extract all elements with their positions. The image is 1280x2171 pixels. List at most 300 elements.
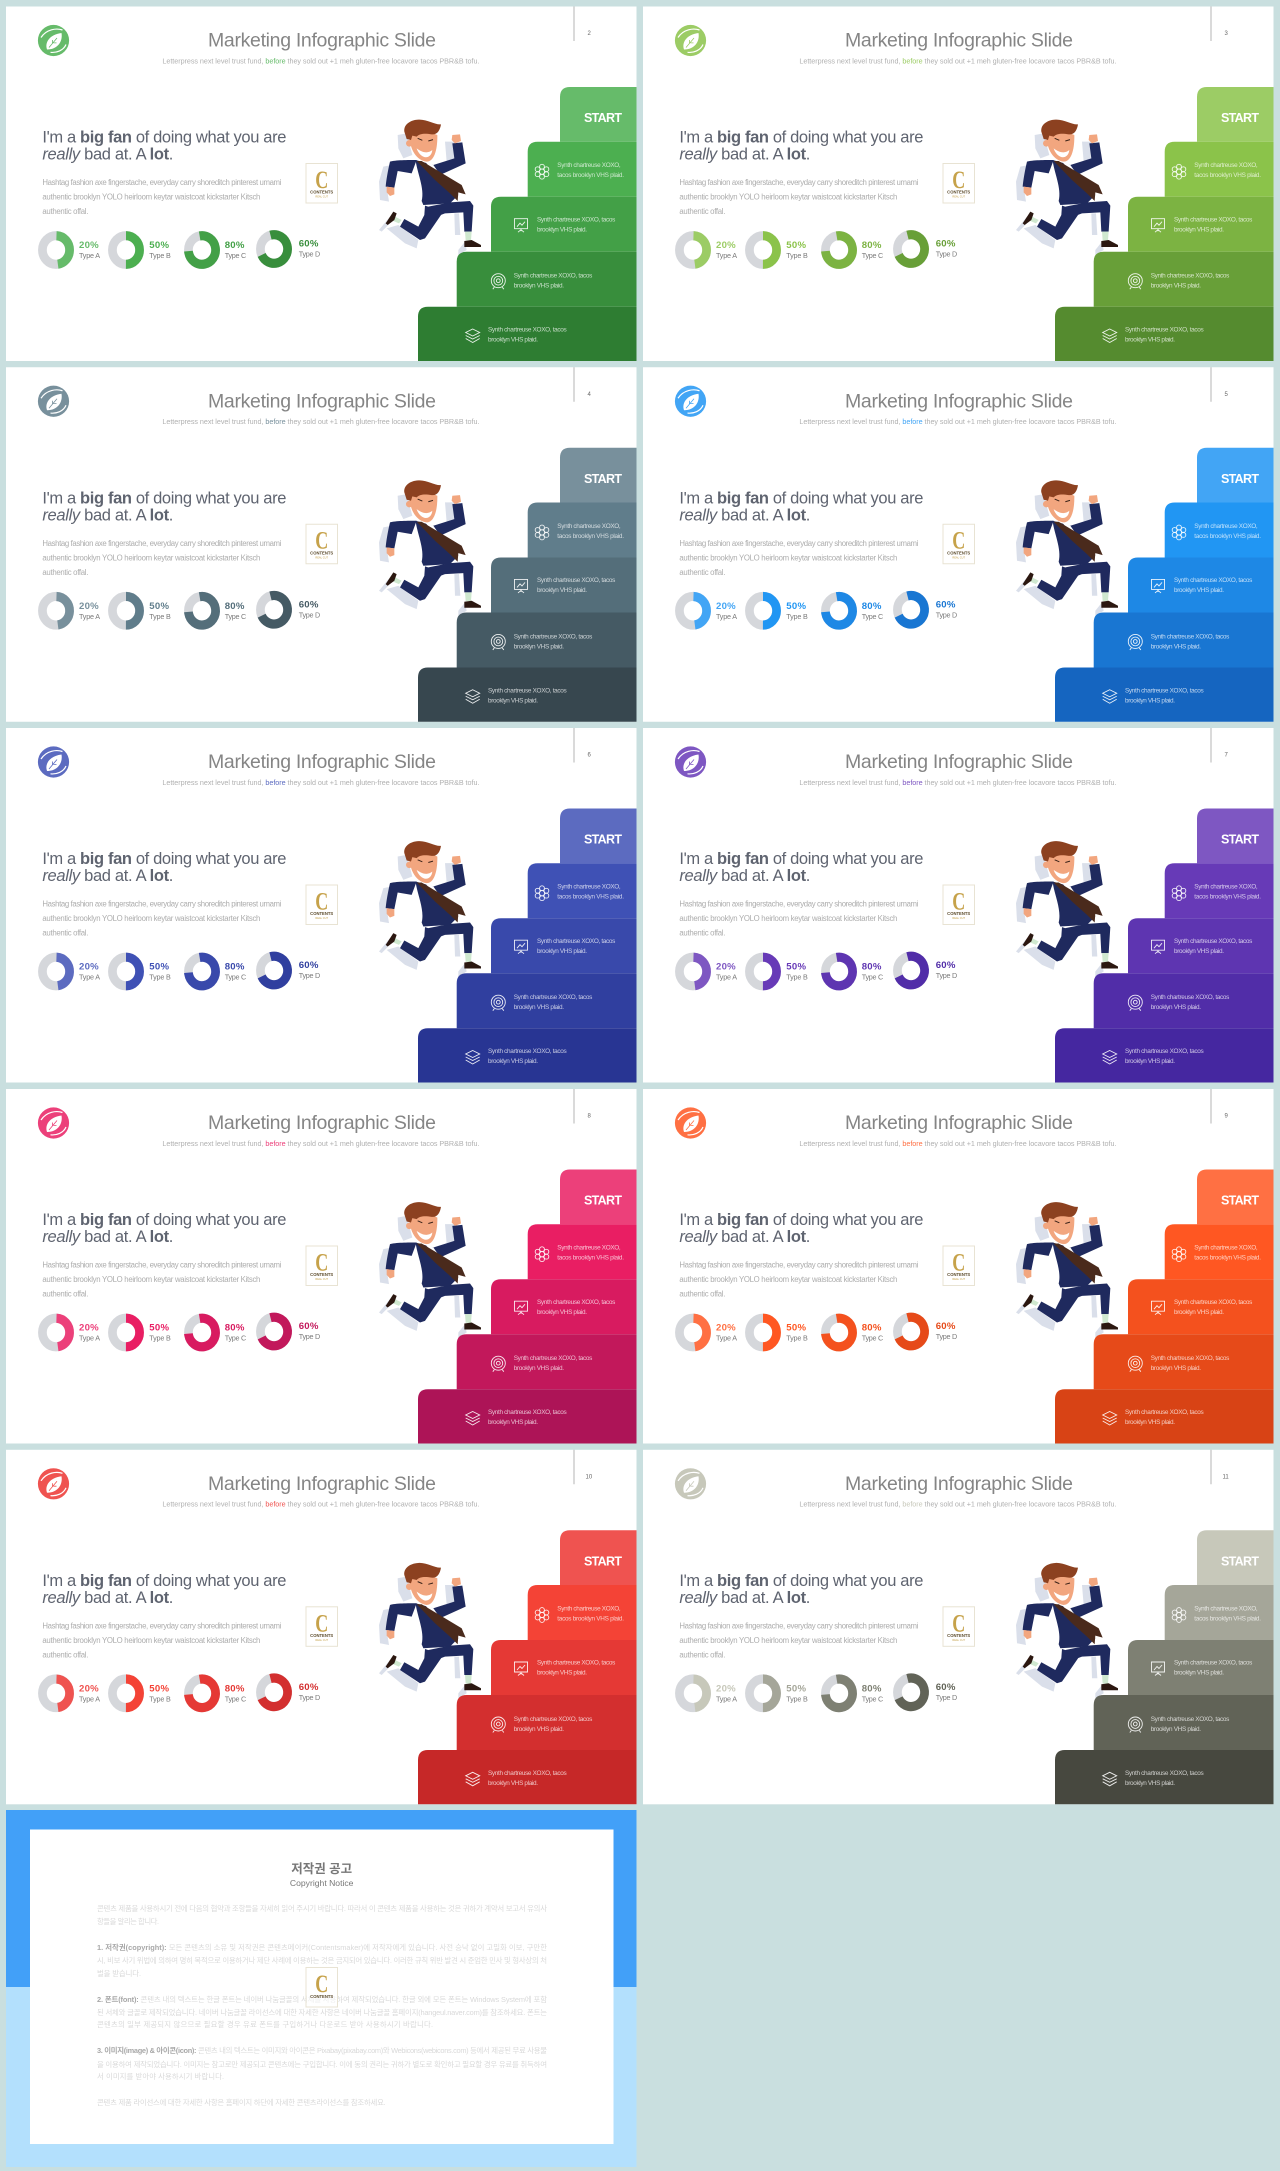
donut: Type A: Type A [716, 612, 737, 621]
stamp: contents logo: C [952, 1609, 965, 1637]
step: target: Synth chartreuse XOXO, tacos [514, 633, 592, 640]
body text: authentic brooklyn YOLO heirloom keytar waistcoat kickstarter Kitsch [42, 192, 260, 202]
headline: I'm a big fan of doing what you are [42, 1211, 286, 1229]
staircase [1055, 1530, 1274, 1804]
page number: 7 [1224, 752, 1228, 758]
staircase [1055, 448, 1274, 722]
step: layers: brooklyn VHS plaid. [488, 1780, 538, 1787]
step: target [457, 1695, 636, 1750]
slide: red, page 10 [6, 1450, 636, 1804]
headline: I'm a big fan of doing what you are [679, 1572, 923, 1590]
step: presentation: brooklyn VHS plaid. [1174, 1670, 1224, 1677]
donut: Type A: 20% [79, 962, 99, 972]
donut: Type B: Type B [786, 1334, 808, 1342]
donut: Type B: 50% [149, 962, 169, 972]
step: layers: Synth chartreuse XOXO, tacos [488, 1048, 567, 1055]
donut: Type A: 20% [79, 1322, 99, 1334]
subtitle: Letterpress next level trust fund, before they sold out +1 meh gluten-free locavore tacos PBR&B tofu. [799, 56, 1116, 65]
donut: Type A: Type A [716, 1334, 737, 1342]
page number: 10 [586, 1474, 593, 1480]
headline [42, 1572, 286, 1607]
logo: leaf [38, 386, 69, 417]
headline: I'm a big fan of doing what you are [42, 489, 286, 507]
donut: Type C [823, 594, 883, 627]
donut: Type D: 60% [299, 960, 319, 971]
slide: indigo, page 6 [6, 728, 636, 1082]
donut: Type A [679, 1318, 737, 1347]
slide: blue, page 5 [643, 367, 1274, 722]
donut: Type D: Type D [936, 1332, 957, 1341]
step: flower: tacos brooklyn VHS plaid. [1194, 1254, 1261, 1262]
donut: Type B: Type B [786, 612, 808, 621]
logo: leaf [675, 1468, 706, 1499]
donut: Type C: Type C [862, 1334, 883, 1342]
donut: Type C [186, 594, 246, 627]
step: layers [1055, 1028, 1274, 1082]
step: presentation: Synth chartreuse XOXO, tacos [1174, 1660, 1252, 1667]
step: target: Synth chartreuse XOXO, tacos [1151, 633, 1229, 640]
step: layers: Synth chartreuse XOXO, tacos [1125, 1770, 1204, 1777]
step: start: START [584, 472, 622, 486]
donut: Type B: Type B [149, 1694, 171, 1703]
step: start: START [584, 832, 622, 846]
stamp: contents logo [943, 1246, 974, 1286]
copyright footer line: 콘텐츠 제품 라이선스에 대한 자세한 사항은 홈페이지 하단에 자세한 콘텐츠라이선스를 참조하세요. [97, 2098, 386, 2107]
step: flower: tacos brooklyn VHS plaid. [1194, 894, 1261, 900]
donut: Type C [823, 1677, 883, 1710]
step: target: brooklyn VHS plaid. [514, 283, 564, 290]
page number: 5 [1224, 392, 1228, 398]
step: layers [418, 1028, 636, 1082]
donut: Type B: 50% [149, 240, 169, 251]
staircase [1055, 87, 1274, 361]
copyright heading: 저작권 공고 [291, 1861, 352, 1876]
donut: Type A [42, 235, 100, 265]
donut: Type B [749, 1679, 808, 1708]
stamp: contents logo: REAL CUT [315, 916, 328, 920]
step: flower: Synth chartreuse XOXO, [1194, 1605, 1258, 1612]
stamp: contents logo: C [952, 1249, 965, 1276]
headline: I'm a big fan of doing what you are [42, 1572, 286, 1590]
donut: Type A [679, 596, 737, 626]
subtitle: Letterpress next level trust fund, before they sold out +1 meh gluten-free locavore tacos PBR&B tofu. [162, 417, 479, 426]
copyright section 1: 1. 저작권(copyright): 모든 콘텐츠의 소유 및 저작권은 콘텐츠메이커(Contentsmaker)에 저작자에게 있습니다. 사전 승낙 없이 고밀화 이보, 구만한 [97, 1943, 547, 1952]
step: layers: Synth chartreuse XOXO, tacos [1125, 687, 1204, 694]
donut: Type C: Type C [225, 1694, 246, 1703]
body text: authentic offal. [42, 928, 88, 938]
stamp: contents logo [306, 1607, 338, 1646]
stamp: contents logo: C [315, 166, 328, 194]
stamp: contents logo [306, 1246, 338, 1286]
step: presentation: brooklyn VHS plaid. [537, 1309, 587, 1316]
subtitle: Letterpress next level trust fund, before they sold out +1 meh gluten-free locavore tacos PBR&B tofu. [162, 778, 479, 787]
donut: Type A [679, 957, 737, 986]
donut: Type A: 20% [79, 1683, 99, 1694]
title: Marketing Infographic Slide [845, 1112, 1073, 1134]
body text [42, 1260, 282, 1298]
logo: leaf [38, 746, 69, 778]
step: flower: tacos brooklyn VHS plaid. [557, 1615, 624, 1622]
stamp: contents logo overlay: C [315, 1970, 328, 1998]
stamp: contents logo: REAL CUT [952, 916, 965, 920]
donut: Type D: Type D [299, 1693, 320, 1702]
step: flower: Synth chartreuse XOXO, [1194, 884, 1258, 890]
staircase [418, 1530, 636, 1804]
body text: authentic brooklyn YOLO heirloom keytar waistcoat kickstarter Kitsch [679, 192, 897, 202]
stamp: contents logo: C [315, 1249, 328, 1276]
donut: Type D: Type D [936, 610, 957, 619]
step: presentation: brooklyn VHS plaid. [1174, 226, 1224, 233]
donut: Type B [112, 596, 171, 625]
step: presentation: brooklyn VHS plaid. [1174, 948, 1224, 955]
stamp: contents logo: CONTENTS [947, 190, 970, 194]
body text: authentic offal. [42, 1290, 88, 1298]
donut: Type A: 20% [716, 1322, 736, 1334]
donut: Type A: Type A [79, 612, 100, 621]
step: flower: tacos brooklyn VHS plaid. [557, 533, 624, 540]
donut: Type B [749, 596, 808, 625]
step: start [560, 1170, 636, 1224]
body text: Hashtag fashion axe fingerstache, everyday carry shoreditch pinterest umami [42, 1260, 282, 1270]
stamp: contents logo overlay: CONTENTS [310, 1994, 333, 1999]
step: layers: brooklyn VHS plaid. [1125, 1780, 1175, 1787]
step: layers: Synth chartreuse XOXO, tacos [1125, 1409, 1204, 1416]
character: running businessman [379, 1202, 481, 1337]
logo: leaf [675, 1107, 706, 1139]
stamp: contents logo: CONTENTS [310, 911, 333, 916]
subtitle: Letterpress next level trust fund, before they sold out +1 meh gluten-free locavore tacos PBR&B tofu. [162, 1500, 479, 1509]
character: running businessman [379, 1563, 481, 1698]
page number: 3 [1224, 31, 1228, 37]
step: target: brooklyn VHS plaid. [1151, 643, 1201, 650]
body text: Hashtag fashion axe fingerstache, everyday carry shoreditch pinterest umami [42, 178, 282, 187]
step: target: Synth chartreuse XOXO, tacos [1151, 273, 1229, 280]
staircase [1055, 1170, 1274, 1444]
donut: Type A [679, 235, 737, 265]
body text: authentic offal. [42, 207, 88, 216]
staircase [418, 448, 636, 722]
body text: Hashtag fashion axe fingerstache, everyday carry shoreditch pinterest umami [679, 178, 919, 187]
page number [574, 6, 592, 41]
step: start [1197, 808, 1274, 863]
step: flower: tacos brooklyn VHS plaid. [1194, 1615, 1261, 1622]
body text: authentic brooklyn YOLO heirloom keytar waistcoat kickstarter Kitsch [42, 1636, 260, 1645]
page number [574, 1089, 592, 1124]
donut: Type B: 50% [786, 1683, 806, 1694]
step: target: Synth chartreuse XOXO, tacos [1151, 1716, 1229, 1723]
page number: 6 [588, 752, 592, 758]
donut: Type D [257, 1675, 320, 1710]
donut: Type D: 60% [936, 960, 956, 971]
donut: Type B [112, 1679, 171, 1708]
headline: really bad at. A lot. [679, 1589, 810, 1607]
step: layers [418, 307, 636, 361]
stamp: contents logo: REAL CUT [315, 555, 328, 559]
donut: Type D [257, 1314, 320, 1349]
step: layers: brooklyn VHS plaid. [488, 1058, 538, 1065]
body text: authentic offal. [42, 568, 88, 577]
step: layers [1055, 667, 1274, 722]
donut: Type B: Type B [149, 612, 171, 621]
step: presentation [491, 1279, 636, 1334]
stamp: contents logo [943, 885, 974, 924]
step: layers: Synth chartreuse XOXO, tacos [488, 687, 567, 694]
body text: authentic offal. [679, 1290, 725, 1298]
step: layers [418, 667, 636, 722]
donut: Type D: 60% [299, 599, 319, 610]
donut: Type A: 20% [79, 601, 99, 612]
logo: leaf [675, 386, 706, 417]
stamp: contents logo [306, 524, 338, 564]
headline: really bad at. A lot. [679, 867, 810, 885]
step: layers [418, 1750, 636, 1804]
step: presentation [1128, 557, 1274, 612]
step: target: brooklyn VHS plaid. [514, 643, 564, 650]
page number [574, 1450, 593, 1484]
donut: Type D: 60% [299, 239, 319, 250]
step: start: START [584, 111, 622, 125]
body text [679, 178, 919, 216]
headline [679, 1572, 923, 1607]
donut: Type A: Type A [79, 251, 100, 260]
copyright intro: 콘텐츠 제품을 사용하시기 전에 다음의 협약과 조항들을 자세히 읽어 주시기 바랍니다. 따라서 이 콘텐츠 제품을 사용하는 것은 귀하가 계약서 보고서 유의사 [97, 1904, 547, 1913]
headline: really bad at. A lot. [679, 506, 810, 524]
donut: Type A [679, 1679, 737, 1708]
step: presentation: Synth chartreuse XOXO, tacos [537, 1299, 615, 1306]
step: flower: Synth chartreuse XOXO, [557, 523, 621, 530]
page number: 8 [588, 1114, 592, 1120]
title: Marketing Infographic Slide [208, 30, 436, 52]
body text: authentic brooklyn YOLO heirloom keytar waistcoat kickstarter Kitsch [679, 1275, 897, 1284]
step: start: START [1221, 1554, 1259, 1568]
headline [42, 850, 286, 885]
donut: Type C: Type C [225, 251, 246, 260]
donut: Type D [257, 232, 320, 266]
body text: Hashtag fashion axe fingerstache, everyday carry shoreditch pinterest umami [679, 900, 919, 908]
page number: 11 [1222, 1474, 1229, 1480]
slide: warm grey, page 11 [643, 1450, 1274, 1804]
donut: Type D: 60% [936, 1682, 956, 1693]
step: flower: tacos brooklyn VHS plaid. [557, 1254, 624, 1262]
stamp: contents logo: CONTENTS [947, 550, 970, 555]
step: layers: brooklyn VHS plaid. [1125, 697, 1175, 704]
donut: Type C [186, 233, 246, 267]
step: layers [1055, 307, 1274, 361]
page number [1211, 367, 1228, 402]
step: flower: Synth chartreuse XOXO, [1194, 523, 1258, 530]
step: flower [528, 502, 636, 557]
logo: leaf [38, 1107, 69, 1139]
stamp: contents logo: CONTENTS [947, 1633, 970, 1638]
step: flower: tacos brooklyn VHS plaid. [557, 894, 624, 900]
copyright intro [97, 1904, 547, 1926]
step: layers: brooklyn VHS plaid. [1125, 1419, 1175, 1426]
donut: Type B: 50% [786, 601, 806, 612]
character: running businessman [1016, 120, 1118, 255]
step: presentation [491, 1640, 636, 1695]
body text [42, 539, 282, 577]
headline: I'm a big fan of doing what you are [42, 129, 286, 147]
body text: Hashtag fashion axe fingerstache, everyday carry shoreditch pinterest umami [679, 1260, 919, 1270]
body text: authentic offal. [679, 568, 725, 577]
donut: Type C: 80% [862, 601, 882, 612]
donut: Type B [112, 957, 171, 986]
subtitle: Letterpress next level trust fund, before they sold out +1 meh gluten-free locavore tacos PBR&B tofu. [799, 778, 1116, 787]
body text: Hashtag fashion axe fingerstache, everyday carry shoreditch pinterest umami [42, 539, 282, 548]
step: start [1197, 1530, 1274, 1585]
step: start: START [584, 1554, 622, 1568]
donut: Type C [186, 955, 246, 988]
title: Marketing Infographic Slide [845, 751, 1073, 773]
step: start [1197, 448, 1274, 502]
donut: Type C: 80% [862, 1322, 882, 1334]
title: Marketing Infographic Slide [208, 1473, 436, 1495]
donut: Type D [894, 232, 957, 266]
step: layers: brooklyn VHS plaid. [488, 1419, 538, 1426]
donut: Type C [823, 233, 883, 267]
donut: Type B: 50% [149, 1322, 169, 1334]
stamp: contents logo [306, 164, 338, 203]
donut: Type A: 20% [79, 240, 99, 251]
donut: Type B: Type B [786, 1694, 808, 1703]
donut: Type A [42, 596, 100, 626]
title: Marketing Infographic Slide [845, 390, 1073, 412]
donut: Type C: Type C [862, 251, 883, 260]
stamp: contents logo: CONTENTS [310, 190, 333, 194]
step: target: brooklyn VHS plaid. [1151, 1004, 1201, 1011]
slide: green, page 2 [6, 6, 636, 361]
title: Marketing Infographic Slide [845, 1473, 1073, 1495]
character: running businessman [1016, 1563, 1118, 1698]
subtitle: Letterpress next level trust fund, before they sold out +1 meh gluten-free locavore tacos PBR&B tofu. [162, 1139, 479, 1148]
step: target: brooklyn VHS plaid. [514, 1004, 564, 1011]
donut: Type D: Type D [936, 1693, 957, 1702]
headline: really bad at. A lot. [42, 867, 173, 885]
subtitle: Letterpress next level trust fund, before they sold out +1 meh gluten-free locavore tacos PBR&B tofu. [799, 1500, 1116, 1509]
donut: Type D: 60% [936, 1321, 956, 1332]
body text: authentic brooklyn YOLO heirloom keytar waistcoat kickstarter Kitsch [679, 1636, 897, 1645]
copyright section 2: 콘텐츠의 일부 제공되지 않으므로 필요할 경우 유료 폰트를 구입하거나 다운로드 받아 사용하시기 바랍니다. [97, 2020, 433, 2029]
page number: 9 [1224, 1114, 1228, 1120]
headline: really bad at. A lot. [679, 1228, 810, 1246]
stamp: contents logo: C [315, 888, 328, 915]
stamp: contents logo: REAL CUT [315, 1277, 328, 1281]
step: target [457, 252, 636, 307]
donut: Type B: Type B [149, 251, 171, 260]
donut: Type C: Type C [862, 1694, 883, 1703]
character: running businessman [379, 841, 481, 976]
copyright section 1: 벌을 받습니다. [97, 1969, 141, 1978]
step: presentation: Synth chartreuse XOXO, tacos [1174, 577, 1252, 584]
step: flower [528, 863, 636, 918]
character: running businessman [379, 120, 481, 255]
headline [679, 1211, 923, 1246]
step: start: START [1221, 111, 1259, 125]
step: presentation: Synth chartreuse XOXO, tacos [537, 1660, 615, 1667]
step: presentation: brooklyn VHS plaid. [1174, 1309, 1224, 1316]
staircase [418, 808, 636, 1082]
headline: really bad at. A lot. [42, 506, 173, 524]
step: presentation [1128, 1279, 1274, 1334]
donut: Type C: 80% [225, 1683, 245, 1694]
slide: deep orange, page 9 [643, 1089, 1274, 1444]
slide: deep purple, page 7 [643, 728, 1274, 1082]
donut: Type D [894, 592, 957, 627]
headline [679, 129, 923, 164]
copyright section 2 [97, 1995, 547, 2029]
step: flower: Synth chartreuse XOXO, [557, 1244, 621, 1252]
page number: 4 [588, 392, 592, 398]
step: layers: brooklyn VHS plaid. [1125, 1058, 1175, 1065]
donut: Type A [42, 957, 100, 986]
stamp: contents logo: REAL CUT [952, 194, 965, 198]
step: flower: Synth chartreuse XOXO, [557, 1605, 621, 1612]
donut: Type D: Type D [299, 971, 320, 980]
step: target: Synth chartreuse XOXO, tacos [1151, 1355, 1229, 1362]
stamp: contents logo: CONTENTS [947, 1272, 970, 1277]
title: Marketing Infographic Slide [208, 751, 436, 773]
stamp: contents logo: CONTENTS [310, 550, 333, 555]
step: presentation [491, 918, 636, 973]
slide: pink, page 8 [6, 1089, 636, 1444]
page number [574, 728, 592, 762]
step: target: brooklyn VHS plaid. [514, 1365, 564, 1372]
body text [42, 900, 282, 938]
step: start [560, 87, 636, 142]
stamp: contents logo: C [952, 888, 965, 915]
headline [42, 489, 286, 524]
copyright section 2: 된 서체와 글꼴로 제작되었습니다. 네이버 나눔글꼴 라이선스에 대한 자세한 사항은 네이버 나눔글꼴 홈페이지(hangeul.naver.com)를 참조하세요. 폰트는 [97, 2008, 547, 2017]
donut: Type C [823, 1316, 883, 1349]
donut: Type D: Type D [936, 971, 957, 980]
step: target [1094, 252, 1274, 307]
donut: Type C: Type C [225, 612, 246, 621]
stamp: contents logo [306, 885, 338, 924]
stamp: contents logo [943, 524, 974, 564]
page number [574, 367, 592, 402]
donut: Type A: 20% [716, 962, 736, 972]
stamp: contents logo: C [315, 1609, 328, 1637]
slide: blue grey, page 4 [6, 367, 636, 722]
page number [1211, 6, 1228, 41]
body text [679, 900, 919, 938]
donut: Type C: Type C [225, 1334, 246, 1342]
character: running businessman [1016, 1202, 1118, 1337]
body text: Hashtag fashion axe fingerstache, everyday carry shoreditch pinterest umami [42, 900, 282, 908]
step: target: brooklyn VHS plaid. [1151, 1365, 1201, 1372]
stamp: contents logo overlay [306, 1968, 338, 2007]
body text [679, 539, 919, 577]
step: target [457, 612, 636, 667]
step: target [1094, 1695, 1274, 1750]
body text: authentic offal. [679, 207, 725, 216]
step: presentation: Synth chartreuse XOXO, tacos [1174, 938, 1252, 945]
step: target [1094, 1334, 1274, 1389]
stamp: contents logo: C [952, 527, 965, 554]
stamp: contents logo: REAL CUT [952, 555, 965, 559]
copyright heading [290, 1861, 354, 1888]
headline [679, 489, 923, 524]
donut: Type B: 50% [786, 240, 806, 251]
donut: Type A: 20% [716, 1683, 736, 1694]
body text: Hashtag fashion axe fingerstache, everyday carry shoreditch pinterest umami [42, 1621, 282, 1630]
step: target: Synth chartreuse XOXO, tacos [1151, 994, 1229, 1001]
step: flower [528, 1224, 636, 1279]
page number [1211, 728, 1228, 762]
body text: authentic offal. [679, 1650, 725, 1659]
stamp: contents logo: REAL CUT [315, 194, 328, 198]
step: target: Synth chartreuse XOXO, tacos [514, 273, 592, 280]
